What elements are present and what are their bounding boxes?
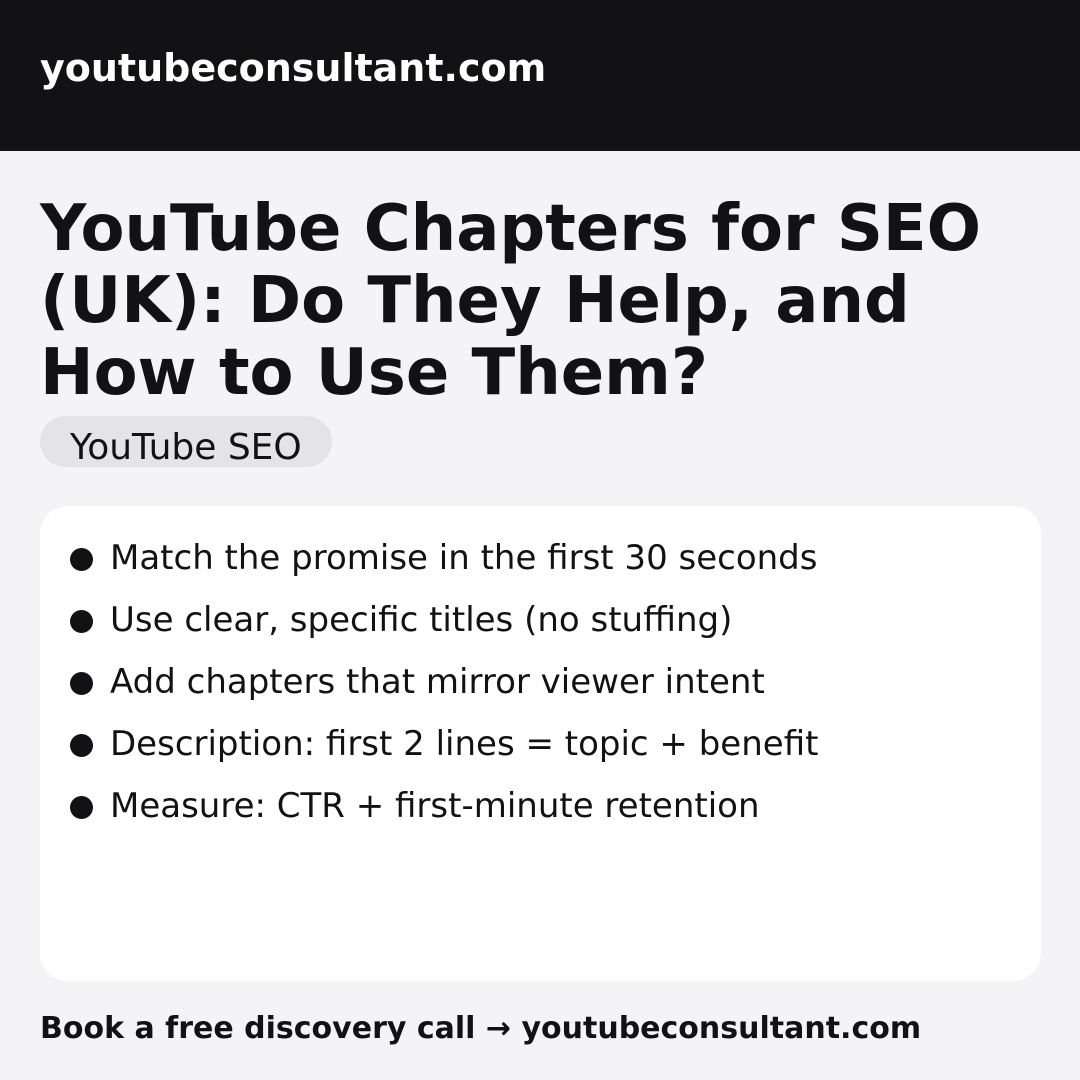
panel: checklist: Description: first 2 lines = topic + benefit: [110, 724, 818, 764]
tag pill: [40, 416, 332, 467]
bullet 1: [70, 538, 817, 578]
title: [39, 192, 981, 410]
bullet 2: [70, 600, 732, 640]
panel: checklist: Measure: CTR + first-minute retention: [110, 786, 760, 826]
footer call to action: Book a free discovery call → youtubeconsultant.com: [40, 1011, 921, 1046]
header bar: youtubeconsultant.com: [40, 46, 546, 90]
header bar: [0, 0, 1080, 151]
bullet 3: [70, 662, 765, 702]
panel: checklist: [40, 506, 1041, 981]
bullet 4: [70, 724, 818, 764]
title: (UK): Do They Help, and: [40, 264, 910, 338]
bullet 5: [70, 786, 760, 826]
tag pill: YouTube SEO: [70, 427, 302, 468]
title: YouTube Chapters for SEO: [40, 192, 981, 266]
panel: checklist: Match the promise in the first 30 seconds: [110, 538, 817, 578]
title: How to Use Them?: [40, 336, 708, 410]
panel: checklist: Add chapters that mirror viewer intent: [110, 662, 765, 702]
panel: checklist: Use clear, specific titles (no stuffing): [110, 600, 732, 640]
